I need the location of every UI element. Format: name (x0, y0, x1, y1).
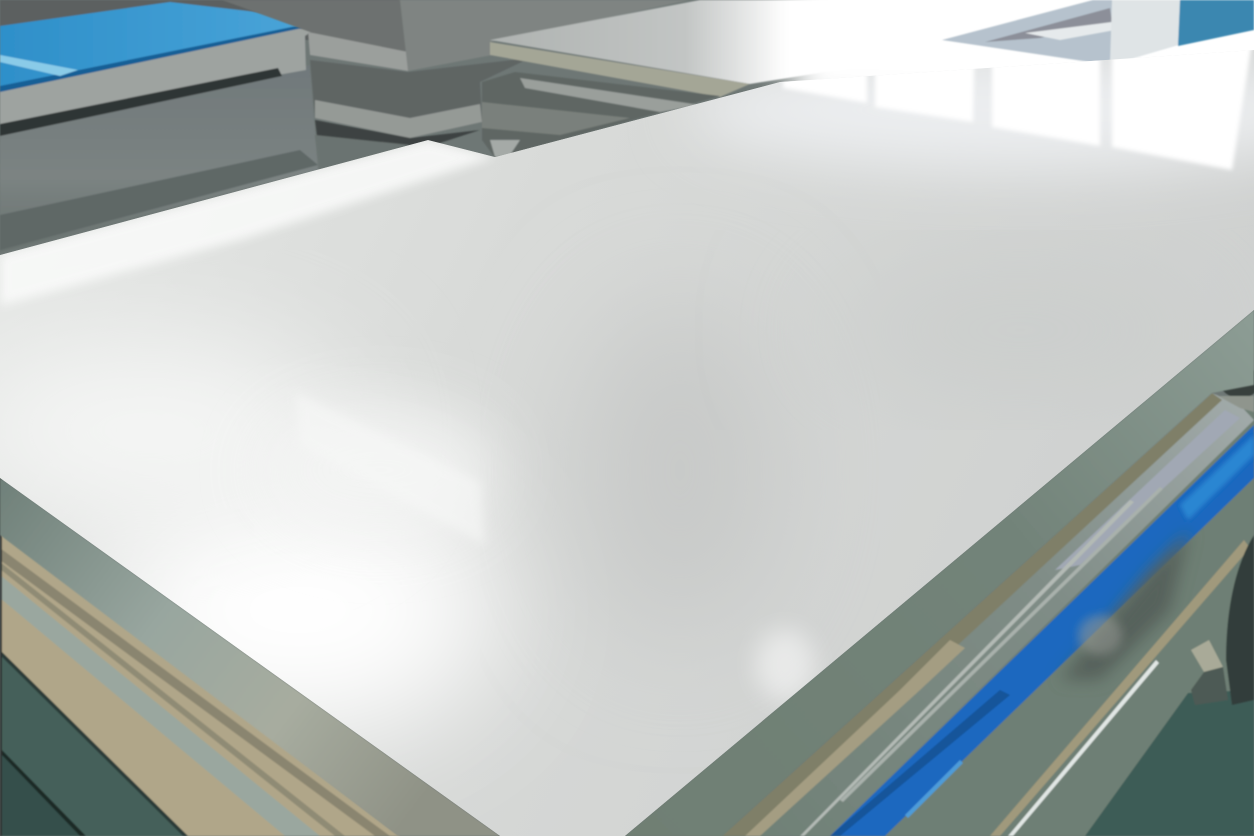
top right white glare (790, 0, 1254, 130)
white line (1008, 660, 1159, 836)
blue protective strip (830, 425, 1254, 836)
distant stack with blue sheet, top right (942, 0, 1254, 65)
grey rail on pallet (0, 575, 320, 836)
sheet thickness: left edge (0, 478, 500, 836)
tan support block (1191, 640, 1223, 672)
ribbed tan groove (722, 393, 1222, 836)
thin top sheet (490, 0, 900, 84)
wooden strip (990, 540, 1250, 836)
soft reflections (100, 480, 500, 740)
window reflections (782, 50, 1252, 171)
glow fading over upper right of the sheet (690, 50, 1254, 170)
lower right rail and floor (720, 366, 1254, 836)
pallet grooves (0, 548, 390, 836)
lower left timber pallet (0, 478, 400, 836)
blue protective film sheet (0, 2, 326, 88)
lower block (310, 58, 530, 138)
low stack (482, 72, 720, 158)
dark green base (0, 653, 187, 836)
bolt (1220, 366, 1254, 398)
dark roller (1226, 535, 1254, 705)
background stacks: top left (0, 0, 400, 252)
floor (1085, 690, 1254, 836)
mottled shadow under strip (1060, 530, 1190, 680)
grey rail (722, 393, 1254, 836)
pale reflective band (1055, 410, 1240, 570)
background stacks: top centre (222, 0, 900, 172)
sheet thickness: right edge (625, 310, 1254, 836)
upper block (222, 0, 408, 70)
